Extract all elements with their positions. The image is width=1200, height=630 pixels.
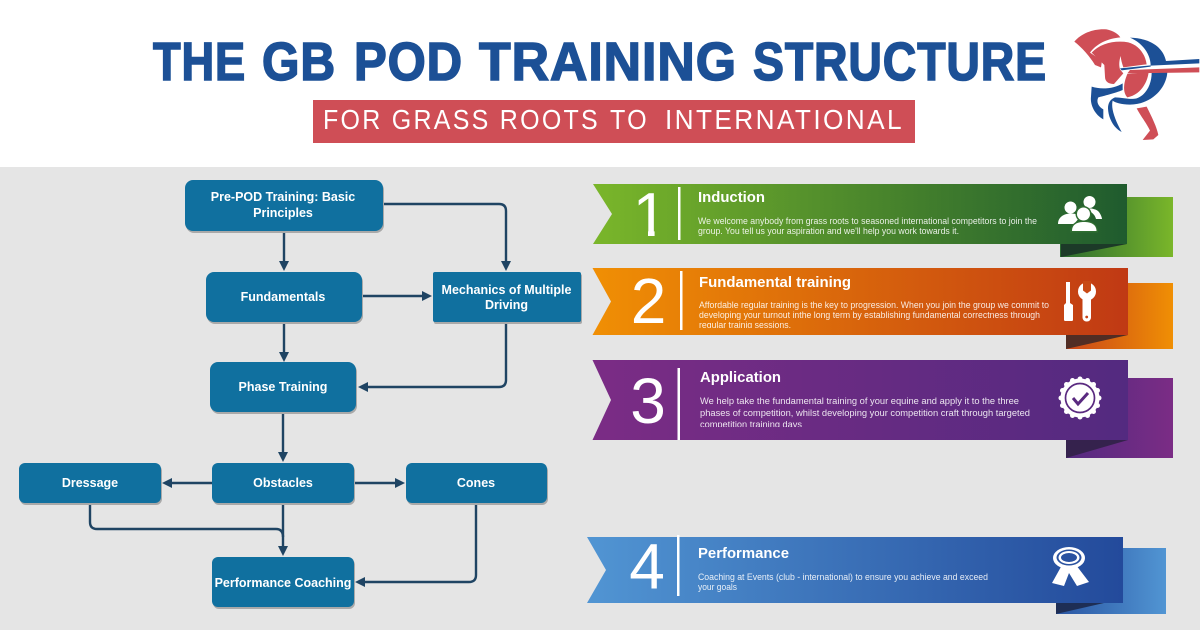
- description: fundamental training: [699, 302, 1049, 328]
- box: dressage: [19, 463, 162, 505]
- box: obstacles: Obstacles: [253, 476, 313, 490]
- description: fundamental training: regular trainig sessions.: [699, 320, 791, 331]
- description: performance: [698, 572, 988, 593]
- description: application: phases of competition, whilst developing your competition craft through targeted: [700, 408, 1030, 419]
- description: induction: [698, 216, 1037, 237]
- description: induction: group. You tell us your aspiration and we'll help you work towards it.: [698, 226, 959, 237]
- box: mechanics of multiple driving: [433, 272, 582, 324]
- box: mechanics of multiple driving: Mechanics of Multiple: [442, 283, 571, 297]
- subtitle banner: INTERNATIONAL: [665, 104, 904, 135]
- ribbon 2: fundamental training: [592, 265, 1173, 349]
- ribbon 3: application: [592, 360, 1173, 458]
- heading: induction: Induction: [698, 189, 765, 206]
- description: application: We help take the fundamental training of your equine and apply it to the three: [700, 396, 1019, 407]
- title: GB: [262, 32, 336, 92]
- box: phase training: Phase Training: [239, 380, 327, 394]
- subtitle banner: [313, 100, 915, 143]
- subtitle banner: TO: [610, 104, 649, 135]
- heading: application: Application: [700, 369, 781, 386]
- icon: award rosette: [1052, 547, 1089, 586]
- subtitle banner: FOR GRASS ROOTS: [323, 104, 600, 135]
- box: phase training: [210, 362, 357, 414]
- number 1: 1: [633, 181, 667, 250]
- description: fundamental training: developing your turnout inthe long term by establishing fundamental correctness through: [699, 310, 1040, 321]
- title: STRUCTURE: [753, 32, 1047, 92]
- icon: screwdriver and wrench: [1064, 281, 1096, 322]
- description: performance: Coaching at Events (club - international) to ensure you achieve and exceed: [698, 572, 988, 583]
- ribbon 1: induction: [593, 181, 1173, 257]
- logo: horse and rider: [1074, 29, 1199, 140]
- box: performance coaching: [212, 557, 355, 609]
- description: performance: your goals: [698, 582, 737, 593]
- connector arrows: [90, 204, 511, 587]
- number 4: 4: [629, 530, 665, 602]
- icon: group of people: [1058, 196, 1102, 232]
- icon: check badge: [1058, 376, 1102, 420]
- description: fundamental training: Affordable regular training is the key to progression. When you join the group we commit to: [699, 300, 1049, 311]
- box: fundamentals: Fundamentals: [241, 290, 325, 304]
- flowchart: [19, 180, 582, 609]
- box: dressage: Dressage: [62, 476, 118, 490]
- number 3: 3: [630, 365, 666, 437]
- box: cones: Cones: [457, 476, 495, 490]
- box: obstacles: [212, 463, 355, 505]
- heading: performance: Performance: [698, 545, 789, 562]
- box: fundamentals: [206, 272, 363, 324]
- background panel: [0, 167, 1200, 630]
- ribbon 4: performance: [587, 530, 1166, 614]
- box: cones: [406, 463, 548, 505]
- description: induction: We welcome anybody from grass roots to seasoned international competitors to join the: [698, 216, 1037, 227]
- number 2: 2: [631, 265, 666, 337]
- title: [153, 32, 1047, 92]
- title: POD: [354, 32, 463, 92]
- heading: fundamental training: Fundamental training: [699, 274, 851, 291]
- box: pre-pod training: Principles: [253, 206, 313, 220]
- box: performance coaching: Performance Coaching: [215, 576, 351, 590]
- box: pre-pod training: Pre-POD Training: Basic: [211, 190, 355, 204]
- box: pre-pod training: [185, 180, 384, 233]
- title: THE: [153, 32, 246, 92]
- title: TRAINING: [479, 32, 737, 92]
- box: mechanics of multiple driving: Driving: [485, 298, 528, 312]
- description: application: [700, 398, 1030, 427]
- description: application: competition training days: [700, 420, 802, 430]
